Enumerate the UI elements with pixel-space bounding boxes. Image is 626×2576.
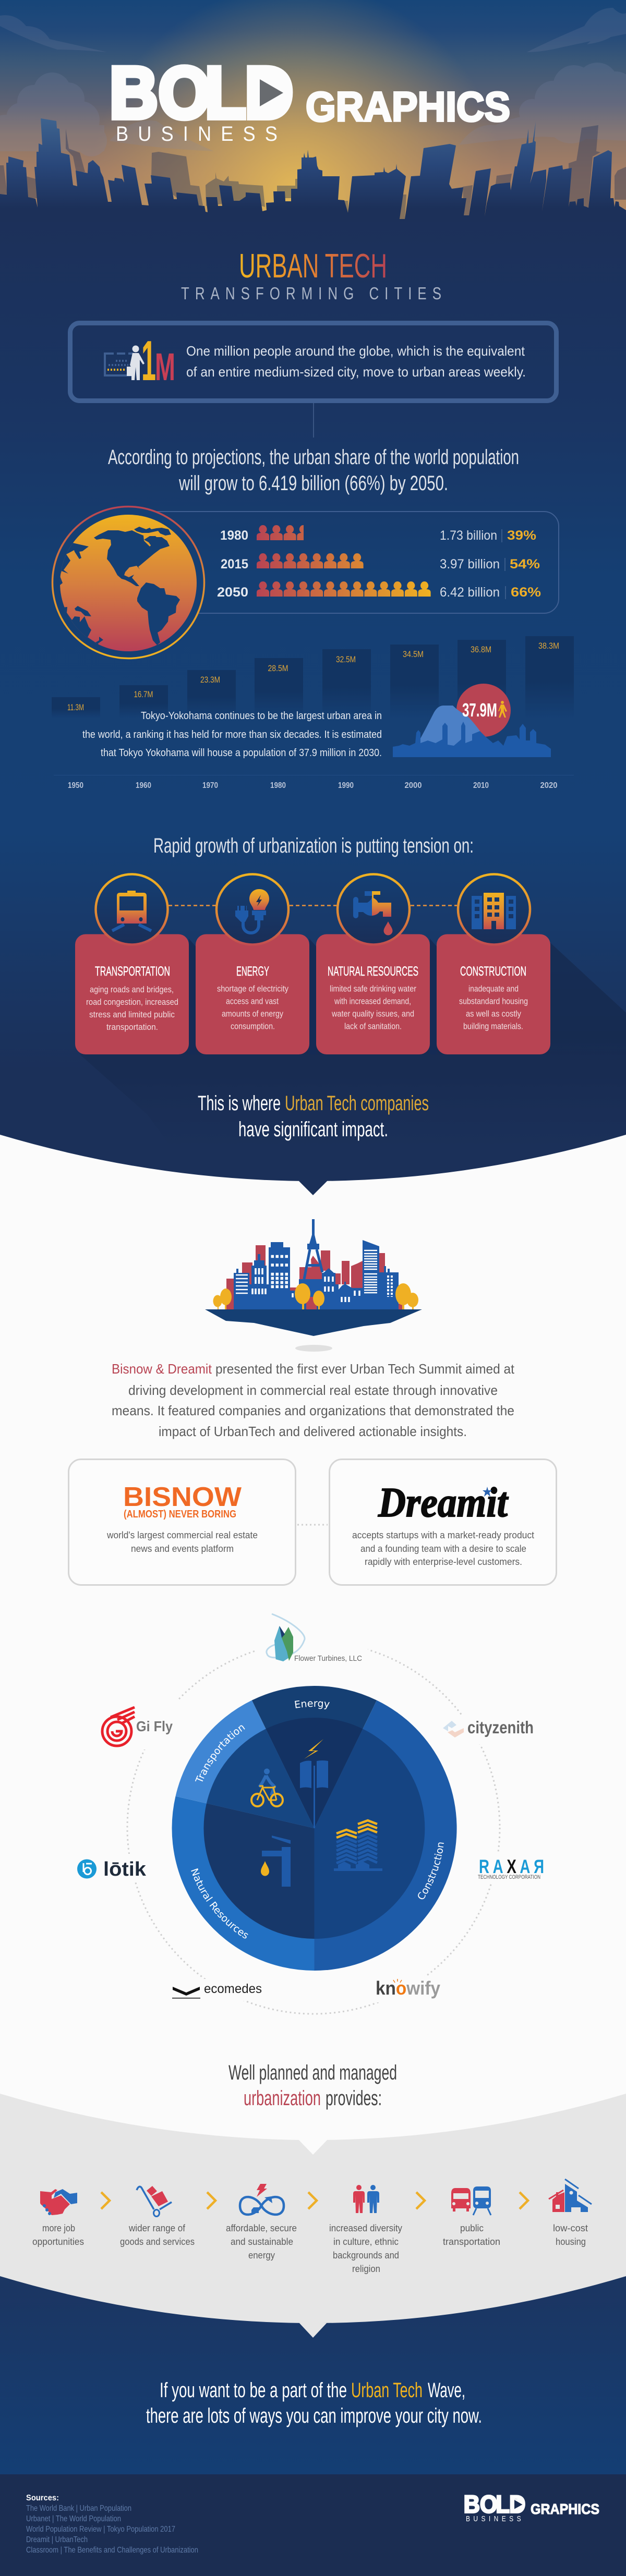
body: inadequate and: [468, 983, 519, 994]
illustration: Tokyo skyline with 37.9M sun: [393, 684, 551, 757]
text block: summit: means. It featured companies and organizations that demonstrated the: [112, 1403, 514, 1418]
sector labels: Natural Resources: [191, 1868, 248, 1939]
logo: Bold Business Graphics: [110, 52, 510, 145]
body: [459, 983, 528, 1031]
body: road congestion, increased: [86, 997, 178, 1007]
benefit: goods: wider range of: [128, 2222, 186, 2233]
logo: Dreamit: Dreamit: [378, 1480, 509, 1526]
text block: summit: impact of UrbanTech and delivered actionable insights.: [159, 1424, 467, 1439]
illustration: floating city: [205, 1219, 422, 1352]
year axis: 1970: [202, 781, 218, 790]
description: world's largest commercial real estate: [106, 1530, 258, 1540]
title: TRANSPORTATION: [95, 964, 170, 979]
panel: energy: [196, 934, 309, 1054]
text block: summit: [112, 1361, 515, 1439]
windows: [236, 1250, 377, 1293]
year axis: 2000: [405, 781, 422, 790]
bar values: 36.8M: [471, 645, 491, 654]
outer sectors: [252, 1686, 377, 1828]
heading: impact: This is where: [198, 1092, 281, 1115]
icon: calendar and commuter: M: [155, 345, 175, 388]
icon: water tap: [338, 874, 410, 945]
benefit: energy: energy: [248, 2250, 275, 2261]
description: news and events platform: [131, 1544, 234, 1554]
benefit: public transportation: transportation: [443, 2236, 500, 2247]
heading: provides: provides:: [326, 2087, 382, 2110]
sources: Urbanet | The World Population: [26, 2514, 121, 2523]
clouds: [0, 8, 626, 156]
text block: summit: Bisnow & Dreamit: [112, 1361, 212, 1377]
heading: tension: Rapid growth of urbanization is putting tension on:: [153, 834, 474, 857]
logo: Flower Turbines: [256, 1611, 368, 1666]
sources: Sources:: [26, 2494, 59, 2502]
row 2015: 3.97 billion: [440, 557, 500, 572]
benefit: diversity: [329, 2185, 403, 2274]
GRAPHICS wordmark: GRAPHICS: [306, 83, 510, 130]
heading: impact: [198, 1092, 429, 1141]
logo: Bisnow: (ALMOST) NEVER BORING: [124, 1509, 236, 1520]
heading: impact: have significant impact.: [238, 1118, 388, 1141]
icon: light bulb and plug: [216, 874, 288, 945]
text block: Tokyo-Yokohama: Tokyo-Yokohama continues to be the largest urban area in: [141, 710, 382, 722]
subtitle: TRANSFORMING CITIES: [181, 284, 447, 303]
red buildings: [226, 1245, 403, 1309]
bar values: 23.3M: [200, 675, 220, 685]
icon: two people: [353, 2185, 379, 2213]
benefit: housing: housing: [556, 2236, 586, 2247]
bar values: 16.7M: [134, 689, 153, 699]
header sky: [0, 0, 626, 229]
description: and a founding team with a desire to scale: [360, 1544, 526, 1554]
icon: cyclist: [251, 1769, 283, 1806]
year axis: [68, 781, 558, 790]
benefit: jobs: [32, 2189, 84, 2247]
sector labels: Transportation: [195, 1725, 245, 1781]
year axis: 2010: [473, 781, 489, 790]
logo: lotik: [73, 1854, 149, 1882]
dotted orbit ring: [127, 1642, 500, 2014]
body: [86, 985, 178, 1032]
text block: summit: presented the first ever Urban Tech Summit aimed at: [215, 1361, 515, 1377]
icon: towers: [334, 1820, 382, 1871]
BUSINESS wordmark: BUSINESS: [116, 123, 287, 145]
callout panel: one million: [70, 323, 556, 400]
bar values: 34.5M: [403, 649, 424, 659]
logo: ecomedes: [170, 1979, 266, 2001]
closing message: Wave,: [428, 2379, 465, 2402]
white middle section, gray band and lower navy base: [0, 1095, 626, 2475]
benefit: jobs: more job: [42, 2222, 75, 2233]
text block: Tokyo-Yokohama: [82, 710, 382, 759]
sources: World Population Review | Tokyo Population 2017: [26, 2525, 175, 2534]
closing message: there are lots of ways you can improve your city now.: [146, 2404, 482, 2427]
description: accepts startups with a market-ready product: [352, 1530, 534, 1540]
footer logo: GRAPHICS: [531, 2501, 599, 2517]
blue buildings: [234, 1240, 399, 1309]
year axis: 2020: [540, 781, 558, 790]
panel: urban population projections: [156, 511, 559, 614]
callout text: of an entire medium-sized city, move to urban areas weekly.: [186, 364, 526, 380]
logo: cityzenith: cityzenith: [467, 1718, 534, 1737]
sector labels: Construction: [418, 1842, 444, 1899]
body: stress and limited public: [89, 1010, 175, 1019]
panel: construction: [437, 934, 550, 1054]
row 2015: [221, 553, 540, 572]
body: shortage of electricity: [217, 983, 288, 994]
body: consumption.: [231, 1021, 275, 1031]
benefit: housing: [549, 2179, 592, 2247]
benefit: diversity: religion: [352, 2263, 380, 2274]
closing message: If you want to be a part of the: [160, 2379, 347, 2402]
logo: lotik: lōtik: [103, 1858, 147, 1880]
row 1980: 1980: [220, 528, 248, 543]
row 2050: 6.42 billion: [440, 585, 500, 600]
icon: calendar and commuter: [105, 329, 175, 393]
white curve: [0, 1825, 626, 2155]
body: lack of sanitation.: [344, 1021, 402, 1031]
logo: ecomedes: ecomedes: [204, 1982, 262, 1996]
year axis: 1990: [338, 781, 354, 790]
navy upper section with curved bottom: [0, 222, 626, 1195]
row 2015: 54%: [510, 557, 540, 572]
text block: Tokyo-Yokohama: that Tokyo Yokohama will house a population of 37.9 million in 2030.: [101, 747, 382, 759]
body: substandard housing: [459, 996, 528, 1006]
benefit: jobs: opportunities: [32, 2236, 84, 2247]
bar chart: Tokyo-Yokohama population: [52, 636, 574, 790]
icon: houses: [549, 2179, 592, 2212]
body: limited safe drinking water: [330, 983, 416, 994]
benefit: energy: affordable, secure: [226, 2222, 297, 2233]
benefit: energy: [226, 2184, 297, 2261]
island: [205, 1309, 422, 1336]
arrow: [308, 2192, 317, 2209]
long shadow behind cards: [80, 943, 626, 1064]
benefit: diversity: in culture, ethnic: [333, 2236, 399, 2247]
logo: Gi Fly: [94, 1700, 180, 1749]
footer logo: [464, 2490, 599, 2523]
icon: globe: [52, 507, 204, 658]
title: CONSTRUCTION: [460, 964, 526, 979]
body: [330, 983, 416, 1031]
icon: walker: [498, 701, 507, 718]
sources: The World Bank | Urban Population: [26, 2504, 131, 2513]
panel: natural resources: [316, 934, 430, 1054]
bar values: 32.5M: [336, 654, 356, 664]
icon: train: [96, 874, 168, 945]
row 2015: 2015: [221, 557, 248, 572]
icon: infinity plug: [240, 2184, 284, 2215]
arrow: [416, 2192, 425, 2209]
title: NATURAL RESOURCES: [328, 964, 418, 979]
sector labels: Energy: [295, 1700, 330, 1709]
front skyline: [0, 118, 626, 229]
heading: provides: urbanization: [244, 2087, 321, 2110]
heading: provides: Well planned and managed: [228, 2061, 397, 2084]
text block: summit: driving development in commercial real estate through innovative: [128, 1382, 498, 1398]
arrow: [520, 2192, 528, 2209]
sources: Classroom | The Benefits and Challenges of Urbanization: [26, 2546, 198, 2555]
icon: bus and train: [451, 2186, 491, 2215]
logo: cityzenith: [438, 1716, 537, 1744]
body: aging roads and bridges,: [90, 985, 174, 994]
row 1980: [220, 525, 536, 543]
row 2050: 2050: [217, 585, 248, 600]
closing message: Urban Tech: [351, 2379, 423, 2402]
row 1980: 39%: [507, 528, 536, 543]
benefit: goods: goods and services: [120, 2236, 195, 2247]
bar values: 38.3M: [538, 641, 559, 651]
pie chart: urban tech sectors: [172, 1686, 457, 1971]
trees: [213, 1283, 418, 1309]
logo: Gi Fly: Gi Fly: [136, 1718, 173, 1734]
footer logo: BOLD: [464, 2490, 525, 2518]
heading: projections: [108, 446, 519, 495]
text block: Tokyo-Yokohama: the world, a ranking it has held for more than six decades. It is estimated: [82, 729, 382, 740]
footer: [0, 2474, 626, 2576]
panel: Dreamit: [330, 1459, 556, 1585]
arrow: [101, 2192, 110, 2209]
sources: [26, 2494, 198, 2555]
icon: handshake: [40, 2189, 77, 2215]
row 2050: [217, 581, 541, 600]
row 2050: 66%: [511, 585, 541, 600]
sector labels: [191, 1700, 444, 1939]
description: [352, 1530, 534, 1567]
logo: Bisnow: BISNOW: [123, 1482, 242, 1512]
row 1980: 1.73 billion: [440, 528, 497, 543]
panel: transportation: [75, 934, 189, 1054]
body: with increased demand,: [334, 996, 411, 1006]
benefit: housing: low-cost: [553, 2222, 588, 2233]
bars: [52, 636, 574, 718]
body: building materials.: [463, 1021, 523, 1031]
title: [181, 247, 447, 303]
year axis: 1980: [270, 781, 286, 790]
gray band: [0, 2081, 626, 2338]
benefit: diversity: backgrounds and: [333, 2250, 399, 2261]
description: [106, 1530, 258, 1554]
body: access and vast: [226, 996, 279, 1006]
callout text: [186, 343, 526, 380]
BOLD wordmark: BOLD: [110, 52, 293, 133]
benefit: public transportation: [443, 2186, 500, 2247]
description: rapidly with enterprise-level customers.: [365, 1557, 522, 1567]
logo: Raxar: TECHNOLOGY CORPORATION: [478, 1874, 540, 1880]
title: URBAN TECH: [239, 247, 387, 285]
icon: faucet and drop: [261, 1836, 291, 1887]
heading: provides: [228, 2061, 397, 2110]
value: 37.9M: 37.9M: [462, 699, 497, 721]
bar values: 11.3M: [67, 702, 84, 712]
icon: buildings: [458, 874, 530, 945]
bar values: [67, 641, 559, 712]
heading: impact: Urban Tech companies: [285, 1092, 429, 1115]
body: as well as costly: [466, 1008, 521, 1019]
icon: hand truck: [137, 2186, 172, 2216]
footer logo: BUSINESS: [466, 2514, 524, 2523]
logo: Flower Turbines: Flower Turbines, LLC: [294, 1654, 362, 1663]
year axis: 1960: [136, 781, 151, 790]
benefit: energy: and sustainable: [231, 2236, 293, 2247]
year axis: 1950: [68, 781, 83, 790]
arrow: [207, 2192, 215, 2209]
logo: Raxar: [472, 1854, 548, 1882]
logo: knowify: knowify: [376, 1977, 440, 1999]
benefit: diversity: increased diversity: [329, 2222, 403, 2233]
icon: calendar and commuter: 1: [141, 329, 156, 393]
body: amounts of energy: [222, 1008, 283, 1019]
benefit: public transportation: public: [460, 2222, 484, 2233]
back skyline: [0, 125, 626, 221]
icon: wind turbine and bolt: [300, 1739, 328, 1828]
sources: Dreamit | UrbanTech: [26, 2535, 88, 2544]
logo: Raxar: R A X A Я: [479, 1856, 544, 1877]
heading: projections: will grow to 6.419 billion (66%) by 2050.: [178, 472, 448, 495]
panel: Bisnow: [69, 1459, 295, 1585]
inner sectors: [266, 1718, 363, 1828]
body: [217, 983, 288, 1031]
bar values: 28.5M: [268, 663, 288, 673]
benefit: goods: [120, 2186, 195, 2247]
callout text: One million people around the globe, which is the equivalent: [186, 343, 525, 359]
title: ENERGY: [236, 964, 269, 979]
lower navy section: [0, 2242, 626, 2475]
closing message: [146, 2379, 482, 2427]
body: water quality issues, and: [331, 1008, 414, 1019]
body: transportation.: [106, 1022, 158, 1032]
